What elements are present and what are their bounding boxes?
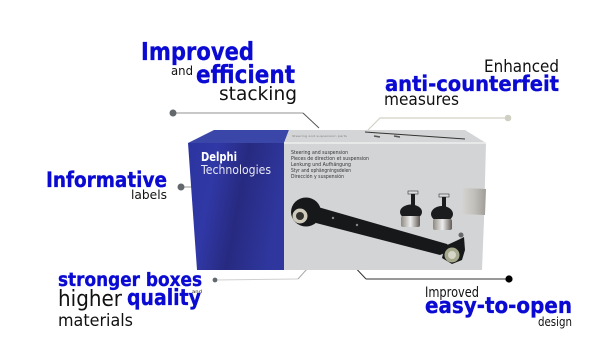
product box: [188, 130, 486, 270]
leader line: stronger boxes: [213, 269, 307, 282]
callout: enhanced anti-counterfeit measures: anti-counterfeit: [385, 72, 559, 96]
callout: improved easy-to-open design: design: [538, 314, 572, 329]
callout: improved easy-to-open design: [425, 285, 572, 329]
callout: improved easy-to-open design: Improved: [425, 285, 479, 301]
leader line: easy-to-open: [350, 262, 513, 283]
leader line: anti-counterfeit: [366, 115, 511, 132]
callout: stronger boxes and higher quality materials: higher: [58, 287, 123, 312]
callout: improved and efficient stacking: stacking: [219, 83, 297, 105]
callout: improved easy-to-open design: easy-to-open: [425, 294, 572, 319]
multilingual product description: Styr and ophängningsdelen: [291, 168, 351, 174]
multilingual product description: Pieces de direction et suspension: [291, 156, 369, 162]
box front blue panel: [188, 143, 285, 270]
callout: improved and efficient stacking: [141, 37, 297, 105]
white fold highlight: [284, 142, 486, 144]
callout: improved and efficient stacking: Improved: [141, 37, 254, 66]
multilingual product description: Lenkung und Aufhängung: [291, 162, 351, 168]
logo: Delphi Technologies: [200, 150, 271, 177]
logo: Delphi Technologies: Technologies: [200, 163, 271, 177]
multilingual product description: Dirección y suspensión: [291, 173, 344, 180]
callout: improved and efficient stacking: and: [171, 64, 193, 78]
logo: Delphi Technologies: Delphi: [201, 150, 237, 164]
box top face: [188, 130, 486, 143]
callout: enhanced anti-counterfeit measures: [384, 57, 559, 110]
callout: improved and efficient stacking: efficient: [196, 60, 295, 89]
callout: informative labels: Informative: [46, 168, 167, 192]
callout: stronger boxes and higher quality materials: materials: [58, 311, 133, 331]
callout: enhanced anti-counterfeit measures: measures: [384, 90, 459, 110]
leader line: stacking: [170, 110, 319, 128]
callout: informative labels: labels: [131, 187, 167, 202]
box front grey panel: [284, 143, 486, 270]
tear-open side tab: [462, 188, 486, 215]
multilingual product description: Steering and suspension: [291, 150, 348, 156]
box top face: Steering and suspension parts: [292, 134, 348, 138]
callout: stronger boxes and higher quality materials: quality: [127, 286, 201, 311]
multilingual product description: [291, 150, 369, 180]
leader line: labels: [178, 184, 192, 190]
callout: stronger boxes and higher quality materials: stronger boxes: [58, 269, 202, 291]
callout: enhanced anti-counterfeit measures: Enhanced: [484, 57, 559, 77]
callout: informative labels: [46, 168, 167, 202]
ball joint left: [400, 191, 422, 227]
ball joint right: [431, 194, 453, 230]
callout: stronger boxes and higher quality materials: [58, 269, 202, 331]
callout: stronger boxes and higher quality materials: and: [192, 289, 202, 295]
suspension arm illustration: [291, 198, 465, 264]
